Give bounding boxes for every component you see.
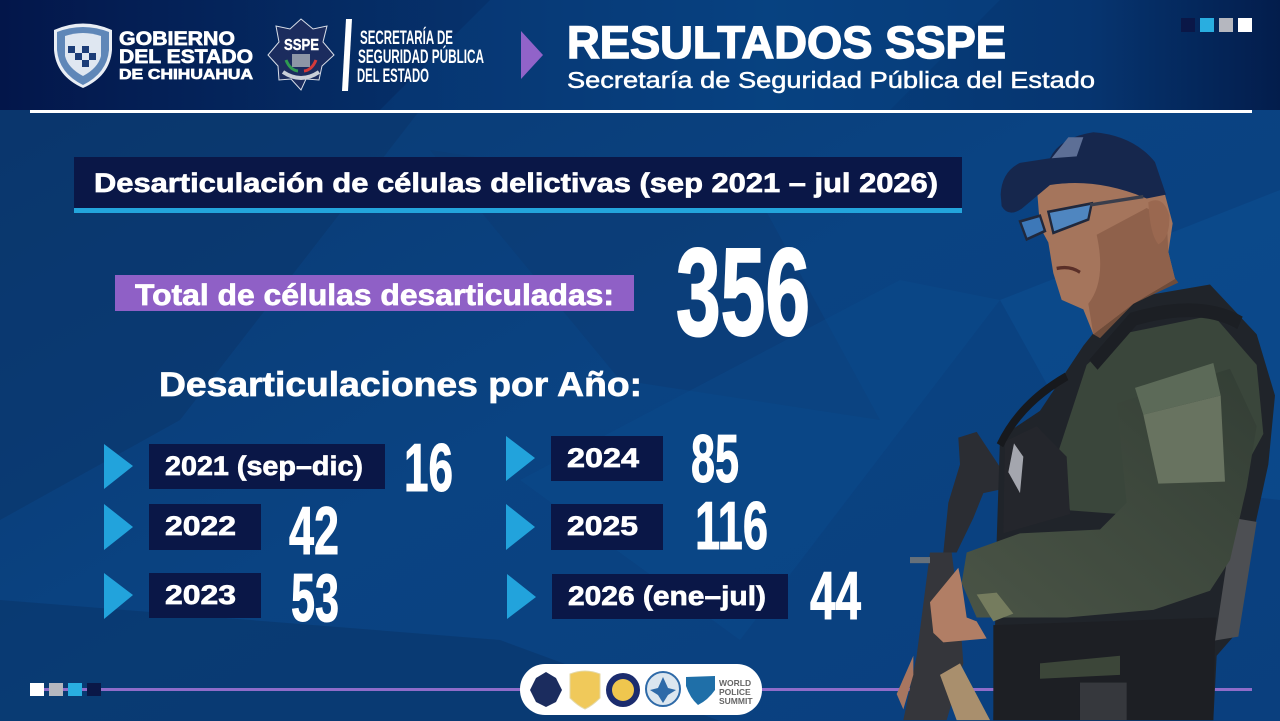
- cap star: [1052, 137, 1083, 158]
- icon: Chihuahua state shield: [54, 24, 112, 88]
- decorative squares: top right: [1181, 18, 1252, 32]
- row: 2022: [104, 493, 339, 569]
- logo text: Gobierno del Estado de Chihuahua: DEL ESTADO: [119, 47, 253, 68]
- row: 2025: [506, 488, 768, 564]
- total number: 356: [676, 224, 810, 362]
- cap: [1001, 132, 1166, 213]
- sling strap: [1000, 376, 1067, 445]
- face: [1037, 181, 1175, 334]
- title: Resultados SSPE: RESULTADOS SSPE: [567, 17, 1006, 68]
- icon: blue star seal: [646, 672, 680, 706]
- row: 2022: 2022: [165, 511, 236, 541]
- icon: world police summit mark: [686, 676, 715, 705]
- logo text: Secretaría de Seguridad Pública del Estado: DEL ESTADO: [357, 66, 429, 87]
- subheading: by year: Desarticulaciones por Año:: [159, 366, 642, 404]
- row: 2022: 42: [289, 493, 339, 569]
- row: 2021: [104, 430, 453, 506]
- section heading bar: Desarticulación de células delictivas (sep 2021 – jul 2026): [94, 168, 938, 198]
- row: 2023: 2023: [165, 580, 236, 610]
- total label: Total de células desarticuladas:: [135, 279, 614, 312]
- header arrow: [521, 31, 543, 79]
- neck: [1093, 271, 1178, 338]
- icon: SSPE seal: [530, 672, 562, 707]
- row: 2021: 16: [404, 430, 453, 506]
- icon: SSPE star badge: SSPE: [284, 37, 319, 54]
- world police summit text: [719, 678, 753, 706]
- mouth: [1057, 268, 1080, 272]
- officer figure: [897, 132, 1275, 720]
- logo text: Secretaría de Seguridad Pública del Estado: SECRETARÍA DE: [360, 27, 453, 49]
- sunglasses: [1020, 197, 1143, 239]
- logo text: Gobierno del Estado de Chihuahua: DE CHIHUAHUA: [119, 66, 253, 83]
- logo text: Gobierno del Estado de Chihuahua: GOBIERNO: [119, 29, 235, 50]
- rifle: [903, 432, 1003, 720]
- logo text: Secretaría de Seguridad Pública del Estado: SEGURIDAD PÚBLICA: [358, 46, 484, 68]
- row: 2026: 2026 (ene–jul): [568, 581, 766, 611]
- row: 2021: 2021 (sep–dic): [165, 451, 363, 481]
- world police summit text: WORLD: [719, 678, 751, 688]
- row: 2025: 2025: [567, 511, 638, 541]
- row: 2026: [507, 558, 861, 634]
- logo text: Gobierno del Estado de Chihuahua: [119, 29, 253, 83]
- sleeve and arm: [962, 369, 1257, 621]
- decorative squares: bottom left: [30, 683, 101, 696]
- row: 2023: [104, 560, 339, 636]
- row: 2026: 44: [810, 558, 861, 634]
- row: 2025: 116: [695, 488, 768, 564]
- divider slash: [342, 19, 352, 91]
- world police summit text: SUMMIT: [719, 696, 753, 706]
- belt and pouches: [993, 618, 1217, 720]
- world police summit text: POLICE: [719, 687, 751, 697]
- subtitle: Secretaría de Seguridad Pública del Estado: [567, 67, 1095, 93]
- torso and vest: [993, 285, 1275, 720]
- footer logos pill: [520, 664, 762, 715]
- hand: [930, 568, 987, 642]
- ear: [1148, 200, 1169, 244]
- arm patch: [1135, 363, 1225, 484]
- lower hand: [897, 656, 913, 709]
- logo text: Secretaría de Seguridad Pública del Estado: [357, 27, 484, 87]
- shoulder strap: [1093, 310, 1240, 365]
- face shadow: [1088, 208, 1175, 334]
- row: 2024: 85: [691, 421, 739, 497]
- icon: gold CALEA badge: [570, 671, 600, 709]
- icon: round CALEA seal: [606, 673, 640, 707]
- section heading bar: [74, 157, 962, 213]
- row: 2024: [506, 421, 739, 497]
- footer line: [30, 688, 1252, 691]
- header band: [0, 0, 1280, 113]
- row: 2024: 2024: [567, 443, 639, 473]
- icon: SSPE star badge: [268, 19, 334, 90]
- row: 2023: 53: [291, 560, 339, 636]
